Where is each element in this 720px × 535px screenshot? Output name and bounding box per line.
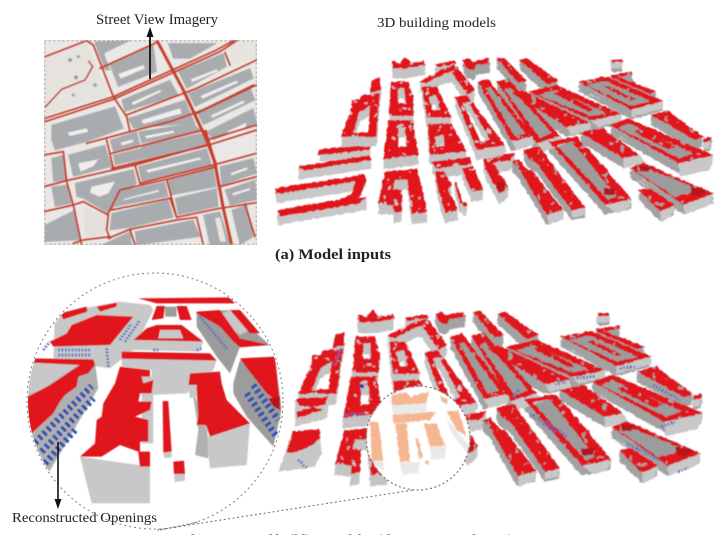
highlighted block: zoom source bbox=[367, 387, 470, 490]
zoom connector lines bbox=[157, 490, 413, 530]
street view roads lower bbox=[44, 130, 257, 245]
center wall with red strip bbox=[122, 352, 217, 395]
chart: 3D building models with openings bbox=[278, 310, 709, 490]
right side building bbox=[233, 357, 282, 447]
left blocks bbox=[278, 397, 330, 472]
building blocks upper bbox=[52, 41, 257, 155]
far back row bbox=[138, 297, 235, 320]
park area bbox=[44, 54, 98, 108]
front left building bbox=[80, 367, 153, 503]
panel: zoomed view circle bbox=[25, 297, 282, 503]
chart: 3D building models input bbox=[275, 57, 713, 225]
upper right block bbox=[197, 310, 270, 373]
openings on facades bbox=[335, 347, 688, 472]
arrow: to reconstructed openings bbox=[54, 442, 62, 509]
zoom circle outline bbox=[27, 273, 283, 529]
center back block bbox=[133, 325, 203, 352]
full model bbox=[293, 310, 709, 487]
upper left block bbox=[43, 302, 153, 368]
right front building bbox=[188, 372, 250, 468]
block rows left bbox=[275, 144, 372, 225]
caption: model inputs: (a) Model inputs bbox=[275, 247, 391, 263]
small block bbox=[173, 461, 185, 482]
panel: street network map bbox=[44, 40, 257, 245]
building blocks lower bbox=[45, 133, 257, 245]
narrow block bbox=[163, 401, 172, 458]
heading: 3D building models: 3D building models bbox=[377, 16, 496, 31]
left building with openings bbox=[25, 358, 98, 473]
label: reconstructed openings: Reconstructed Openings bbox=[12, 511, 157, 526]
heading: street view imagery: Street View Imagery bbox=[96, 12, 219, 28]
zoom source circle outline bbox=[366, 386, 470, 490]
arrow: to street view imagery bbox=[146, 27, 154, 79]
street view roads upper bbox=[45, 40, 257, 163]
